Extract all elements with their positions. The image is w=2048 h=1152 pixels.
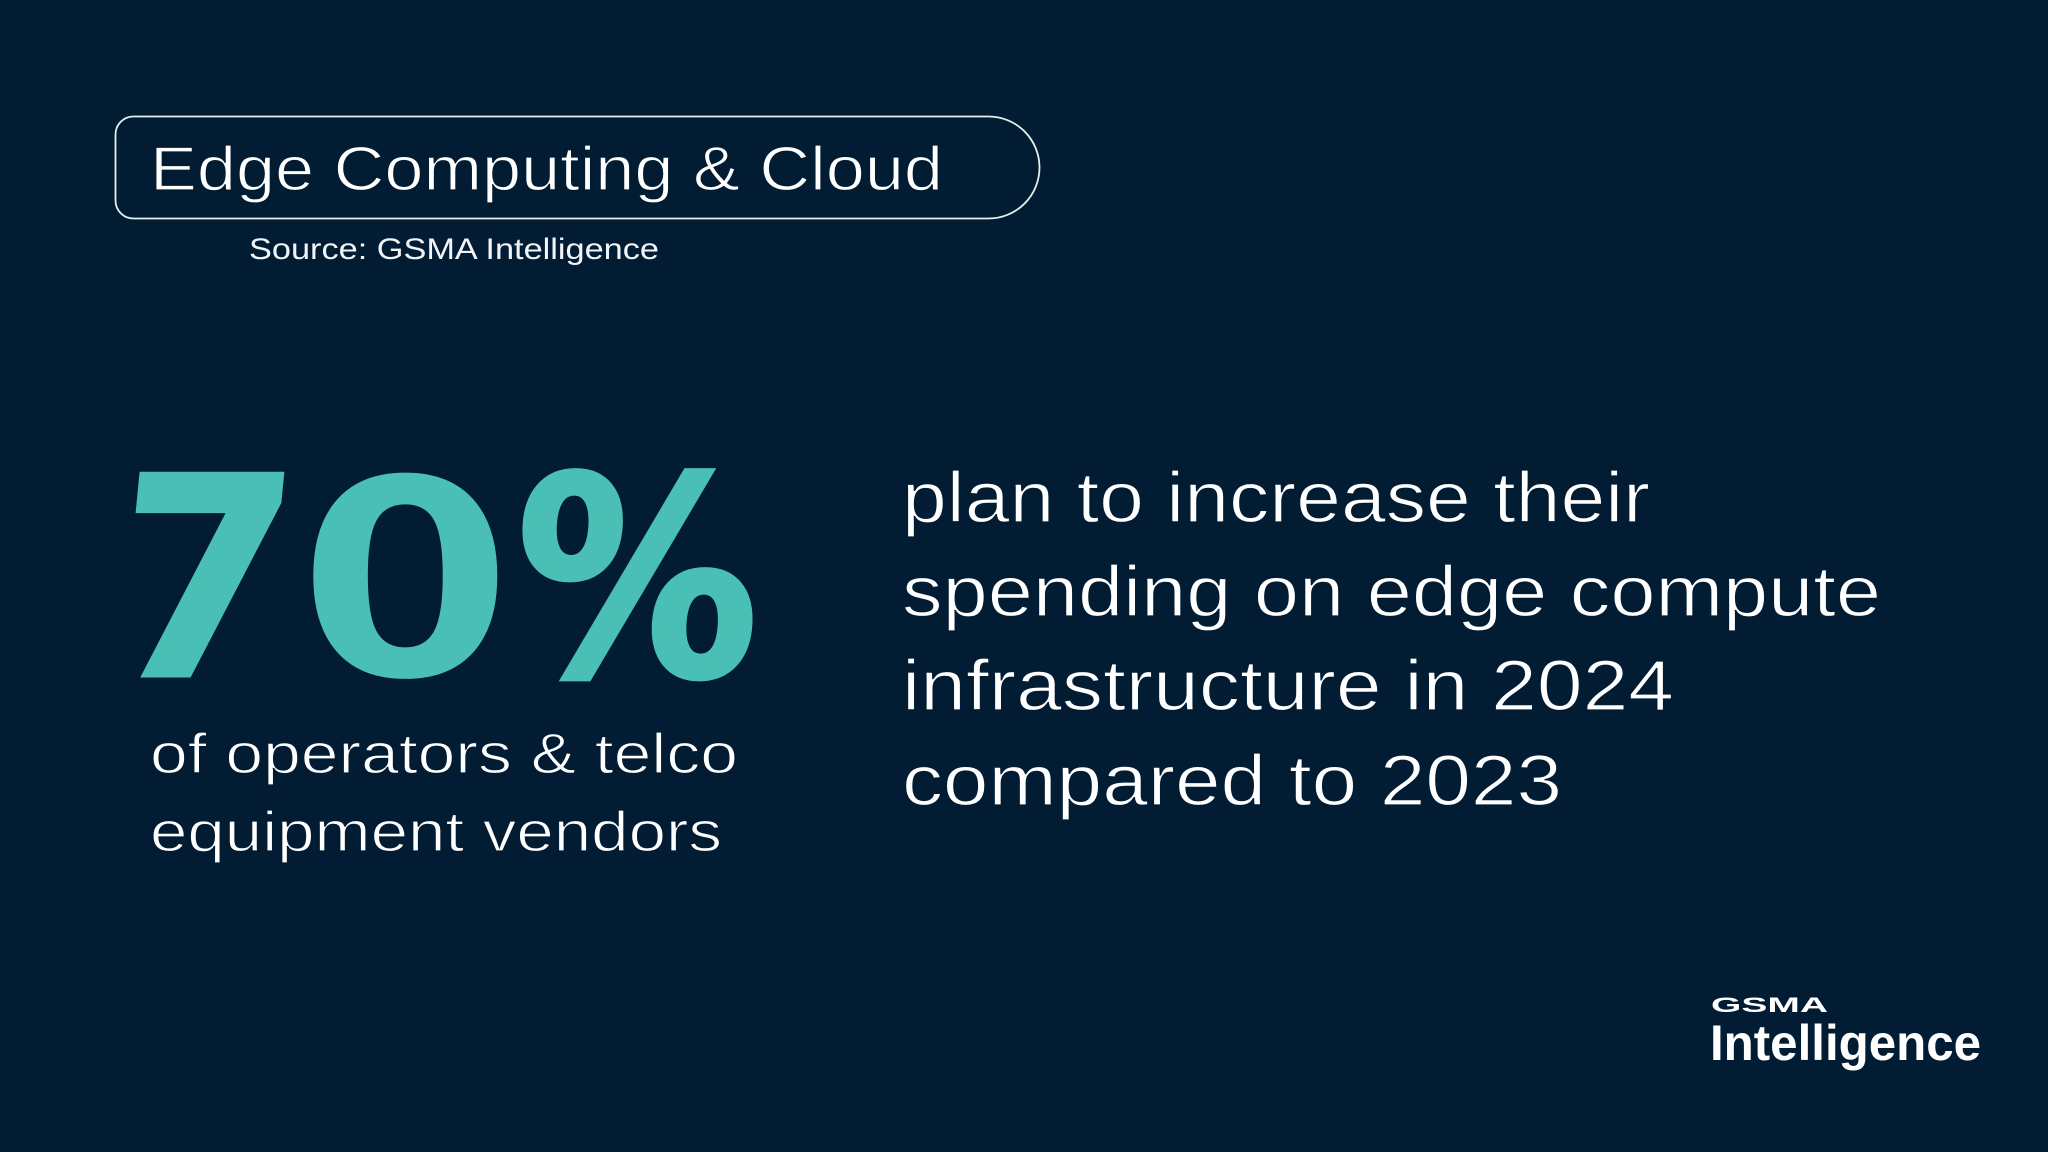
main statement text: compared to 2023 bbox=[902, 742, 1562, 821]
statistic caption: equipment vendors bbox=[150, 800, 722, 864]
category pill with title bbox=[116, 116, 1040, 218]
source line: Source: GSMA Intelligence bbox=[249, 233, 659, 266]
main statement text: spending on edge compute bbox=[902, 553, 1881, 632]
main statement text bbox=[902, 459, 1881, 821]
statistic caption bbox=[150, 722, 738, 864]
big statistic 70%: 7 bbox=[98, 419, 309, 742]
title: Edge Computing & Cloud bbox=[150, 135, 943, 204]
big statistic 70% bbox=[98, 419, 769, 743]
big statistic 70%: 0 bbox=[296, 419, 515, 743]
logo: GSMA Intelligence: Intelligence bbox=[1710, 1015, 1981, 1071]
pill outline bbox=[116, 116, 1040, 218]
statistic caption: of operators & telco bbox=[150, 722, 738, 786]
logo: GSMA Intelligence: GSMA bbox=[1711, 994, 1828, 1017]
main statement text: infrastructure in 2024 bbox=[902, 647, 1674, 726]
big statistic 70%: % bbox=[506, 420, 769, 740]
main statement text: plan to increase their bbox=[902, 459, 1650, 538]
